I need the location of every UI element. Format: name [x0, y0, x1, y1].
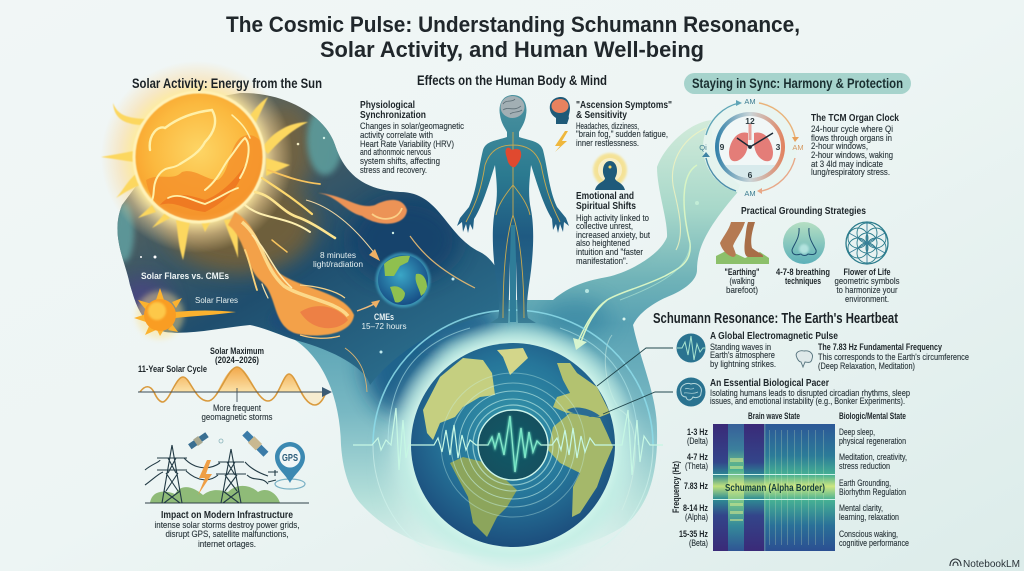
text: biological pacer: An Essential Biological Pacer — [710, 377, 829, 389]
text: global electromagnetic pulse: Earth's atmosphere — [710, 350, 775, 360]
text: ascension symptoms: inner restlessness. — [576, 138, 639, 148]
text: global electromagnetic pulse: by lightning strikes. — [710, 359, 776, 369]
solar flares streaming — [228, 170, 407, 338]
icon: TCM organ clock: AM — [792, 143, 804, 152]
chart: 11-year solar cycle: geomagnetic storms — [202, 412, 273, 422]
text: ascension symptoms: & Sensitivity — [576, 109, 627, 121]
icon: TCM organ clock: 9 — [720, 142, 725, 152]
solar panel labels: 15–72 hours — [362, 321, 406, 331]
text: grounding labels: "Earthing" — [724, 267, 760, 277]
icon: TCM organ clock: Qi — [699, 143, 707, 152]
icon: power grid, satellites and GPS — [145, 430, 309, 503]
text: emotional and spiritual shifts — [576, 190, 650, 266]
chart: brain wave spectrogram table: cognitive performance — [839, 538, 909, 548]
text: biological pacer: issues, and emotional instability (e.g., Bonker Experiments). — [710, 396, 905, 406]
text: grounding labels: geometric symbols — [834, 276, 900, 286]
chart: brain wave spectrogram table: 8-14 Hz — [683, 503, 708, 513]
text: TCM organ clock: at 3 4ld may indicate — [811, 159, 883, 169]
text: TCM organ clock: 24-hour cycle where Qi — [811, 124, 893, 134]
panel: central energy swirl — [295, 120, 740, 557]
icon: nose breathing — [783, 222, 825, 264]
heading: practical grounding strategies: Practical Grounding Strategies — [741, 205, 866, 217]
chart: brain wave spectrogram table: 4-7 Hz — [687, 452, 708, 462]
icon: TCM organ clock: AM — [744, 97, 756, 106]
text: physiological synchronization: stress and recovery. — [360, 165, 427, 175]
text: physiological synchronization: system shifts, affecting — [360, 156, 440, 166]
text: physiological synchronization: Changes in solar/geomagnetic — [360, 121, 465, 131]
text: fundamental frequency: This corresponds to the Earth's circumference — [818, 352, 969, 362]
text: grounding labels: barefoot) — [726, 285, 758, 295]
icon: pulse circle — [676, 334, 706, 362]
text: emotional and spiritual shifts: High activity linked to — [576, 213, 649, 223]
heading pill: staying in sync: Staying in Sync: Harmony & Protection — [692, 75, 903, 91]
panel: solar dark blob — [114, 93, 503, 392]
title: The Cosmic Pulse: Understanding Schumann Resonance, — [226, 12, 800, 37]
big sun — [101, 61, 308, 260]
chart: brain wave spectrogram table: Schumann (Alpha Border) — [725, 483, 825, 494]
text: physiological synchronization: Physiological — [360, 99, 415, 111]
text: emotional and spiritual shifts: also heightened — [576, 238, 630, 248]
chart: 11-year solar cycle: More frequent — [213, 403, 261, 413]
chart: brain wave spectrogram table: Conscious waking, — [839, 529, 898, 539]
text: fundamental frequency — [818, 342, 969, 371]
solar panel labels: CMEs — [374, 312, 394, 322]
text: emotional and spiritual shifts: intuition and "faster — [576, 247, 643, 257]
text: impact on modern infrastructure: internet ortages. — [198, 539, 256, 549]
chart: brain wave spectrogram table: Brain wave State — [748, 411, 800, 421]
icon: bare feet on grass — [716, 222, 769, 264]
text: grounding labels: environment. — [845, 294, 889, 304]
chart: brain wave spectrogram table — [671, 411, 909, 551]
chart: 11-year solar cycle: Solar Maximum — [210, 346, 264, 356]
icon: TCM organ clock: 6 — [748, 170, 753, 180]
text: global electromagnetic pulse — [710, 330, 838, 369]
text: global electromagnetic pulse: Standing waves in — [710, 342, 771, 352]
chart: brain wave spectrogram table: 1-3 Hz — [687, 427, 708, 437]
chart: brain wave spectrogram table: (Theta) — [685, 461, 708, 471]
small earth — [376, 252, 430, 308]
text: TCM organ clock: 2-hour windows, — [811, 141, 868, 151]
chart: brain wave spectrogram table: stress reduction — [839, 461, 890, 471]
icon: head with brain — [550, 97, 570, 124]
text: physiological synchronization — [360, 99, 465, 175]
solar panel labels: light/radiation — [313, 259, 363, 269]
solar panel labels: 8 minutes — [320, 250, 356, 260]
chart: brain wave spectrogram table: Biologic/Mental State — [839, 411, 906, 421]
text: impact on modern infrastructure: Impact on Modern Infrastructure — [161, 509, 293, 521]
title — [226, 12, 800, 62]
callout lines from earth to icons — [597, 348, 673, 414]
chart: 11-year solar cycle: (2024–2026) — [215, 355, 259, 365]
text: grounding labels: techniques — [785, 276, 821, 286]
text: grounding labels: to harmonize your — [836, 285, 898, 295]
text: emotional and spiritual shifts: Emotional and — [576, 190, 634, 202]
chart: brain wave spectrogram table: 7.83 Hz — [684, 481, 708, 491]
heading pill: staying in sync — [684, 73, 911, 94]
text: grounding labels: 4-7-8 breathing — [776, 267, 830, 277]
chart: brain wave spectrogram table: Biorhythm Regulation — [839, 487, 906, 497]
text: physiological synchronization: activity correlate with — [360, 130, 433, 140]
icon: TCM organ clock — [699, 97, 804, 198]
text: emotional and spiritual shifts: Spiritual Shifts — [576, 200, 636, 212]
text: impact on modern infrastructure: disrupt GPS, satellite malfunctions, — [166, 529, 288, 539]
text: emotional and spiritual shifts: collective unrest, — [576, 221, 633, 231]
icon: TCM organ clock: AM — [744, 189, 756, 198]
chart: brain wave spectrogram table: Meditation, creativity, — [839, 452, 907, 462]
text: fundamental frequency: The 7.83 Hz Fundamental Frequency — [818, 342, 942, 352]
text: ascension symptoms — [576, 99, 672, 148]
text: emotional and spiritual shifts: increased anxiety, but — [576, 230, 650, 240]
text: ascension symptoms: "brain fog," sudden fatigue, — [576, 129, 668, 139]
icon: flower of life — [846, 222, 888, 264]
chart: brain wave spectrogram table: 15-35 Hz — [679, 529, 708, 539]
chart: brain wave spectrogram table: Earth Grounding, — [839, 478, 891, 488]
text: impact on modern infrastructure: intense solar storms destroy power grids, — [154, 520, 300, 530]
text: impact on modern infrastructure — [154, 509, 300, 549]
text: effects heading: Effects on the Human Body & Mind — [417, 72, 607, 88]
chart: brain wave spectrogram table: Frequency (Hz) — [671, 461, 681, 513]
text: biological pacer — [710, 377, 910, 406]
text: grounding labels: (walking — [730, 276, 755, 286]
text: fundamental frequency: (Deep Relaxation, Meditation) — [818, 361, 915, 371]
chart: 11-year solar cycle: 11-Year Solar Cycle — [138, 364, 207, 374]
solar panel labels: Solar Activity: Energy from the Sun — [132, 75, 322, 91]
text: TCM organ clock: lung/respiratory stress. — [811, 167, 890, 177]
chart: brain wave spectrogram table: learning, relaxation — [839, 512, 899, 522]
heading: Schumann resonance: Schumann Resonance: The Earth's Heartbeat — [653, 310, 898, 327]
icon: meditating head with halo — [593, 153, 627, 190]
icon: lightning bolt — [555, 131, 568, 152]
icon: power grid, satellites and GPS: GPS — [282, 453, 298, 464]
text: global electromagnetic pulse: A Global Electromagnetic Pulse — [710, 330, 838, 342]
text: TCM organ clock: flows through organs in — [811, 133, 892, 143]
text: TCM organ clock: The TCM Organ Clock — [811, 112, 899, 124]
big earth with Schumann pulse — [353, 310, 663, 571]
chart: brain wave spectrogram table: Deep sleep, — [839, 427, 875, 437]
text: physiological synchronization: Heart Rate Variability (HRV) — [360, 139, 454, 149]
icon: TCM organ clock: 12 — [745, 116, 755, 126]
text: TCM organ clock: 2-hour windows, waking — [811, 150, 893, 160]
text: grounding labels: Flower of Life — [844, 267, 891, 277]
figure: human body — [457, 95, 569, 323]
chart: brain wave spectrogram table: physical regeneration — [839, 436, 906, 446]
small sun — [134, 288, 236, 339]
text: biological pacer: Isolating humans leads to disrupted circadian rhythms, sleep — [710, 388, 910, 398]
text: ascension symptoms: Headaches, dizziness, — [576, 121, 639, 131]
chart: brain wave spectrogram table: (Delta) — [687, 436, 708, 446]
icon: brain circle — [676, 378, 706, 406]
logo: NotebookLM: NotebookLM — [963, 559, 1020, 570]
text: grounding labels — [724, 267, 900, 304]
chart: brain wave spectrogram table: (Beta) — [689, 538, 708, 548]
text: physiological synchronization: and athonmoic nervous — [360, 147, 431, 157]
solar panel labels: Solar Flares — [195, 295, 238, 305]
solar panel labels: Solar Flares vs. CMEs — [141, 271, 229, 281]
title: Solar Activity, and Human Well-being — [320, 37, 704, 62]
solar panel labels — [132, 75, 406, 331]
arrow: flow into earth — [573, 300, 607, 350]
icon: TCM organ clock: 3 — [776, 142, 781, 152]
icon: small brain — [796, 351, 813, 367]
chart: brain wave spectrogram table: Mental clarity, — [839, 503, 883, 513]
text: ascension symptoms: "Ascension Symptoms" — [576, 99, 672, 111]
text: emotional and spiritual shifts: manifestation". — [576, 256, 628, 266]
text: TCM organ clock — [811, 112, 899, 177]
chart: brain wave spectrogram table: (Alpha) — [685, 512, 708, 522]
text: physiological synchronization: Synchronization — [360, 109, 426, 121]
chart: 11-year solar cycle — [138, 346, 332, 422]
